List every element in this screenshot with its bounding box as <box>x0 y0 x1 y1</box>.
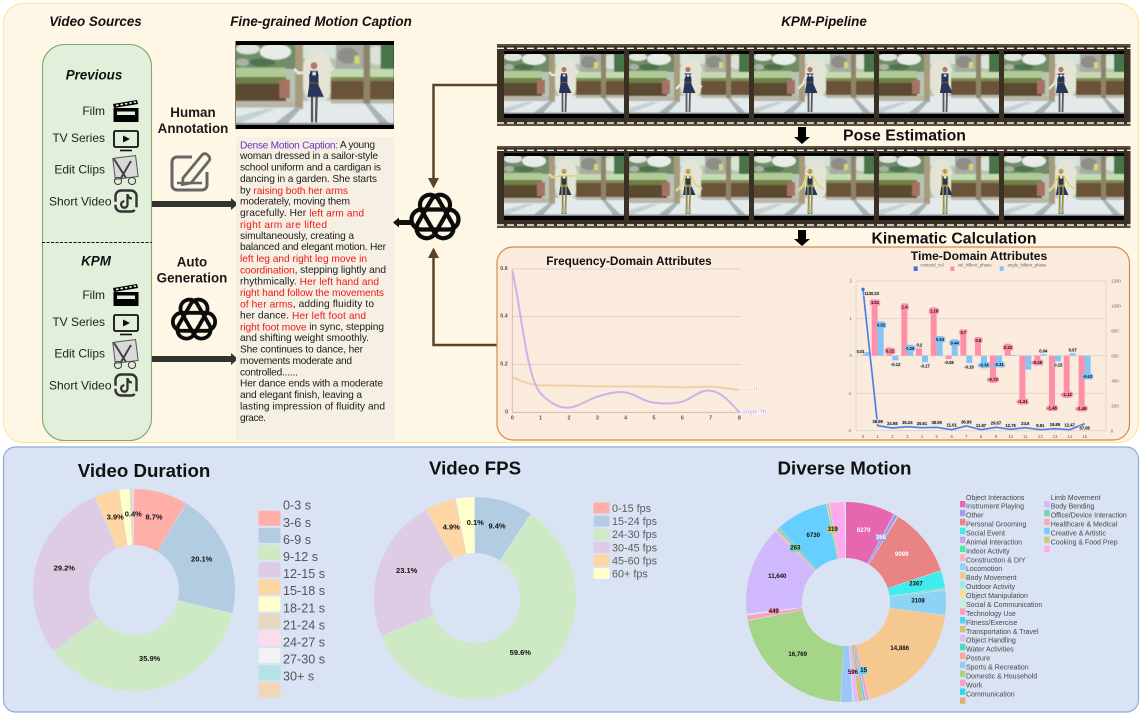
chart: time-domain attributes: 14 <box>1067 434 1073 439</box>
text block: dense motion caption: of her arms, adding fluidity to <box>240 299 374 310</box>
donut chart: video duration: 20.1% <box>191 554 213 564</box>
arrow: model to caption <box>393 218 412 228</box>
chart: time-domain attributes: -1.31 <box>1018 399 1028 404</box>
chart: time-domain attributes: -0.19 <box>964 364 974 369</box>
legend: diverse motion: Other <box>966 513 984 520</box>
chart: time-domain attributes: 0.7 <box>960 330 967 335</box>
chart: frequency-domain attributes: 7 <box>709 415 712 421</box>
chart: frequency-domain attributes: 5 <box>653 415 656 421</box>
chart: time-domain attributes: 0.5 <box>975 338 982 343</box>
legend: video duration: 3-6 s <box>283 516 311 530</box>
text block: dense motion caption: movements moderate and <box>240 356 352 367</box>
legend: video duration: 0-3 s <box>283 499 311 513</box>
donut chart: video FPS: 9.4% <box>488 522 506 530</box>
chart: time-domain attributes: 3 <box>906 434 909 439</box>
text block: dense motion caption <box>236 137 394 440</box>
chart: time-domain attributes: 0.2 <box>916 342 923 347</box>
donut chart: diverse motion: 449 <box>769 608 779 615</box>
chart: time-domain attributes: 5 <box>935 434 938 439</box>
chart: time-domain attributes: 0 <box>862 434 865 439</box>
arrow: to pose estimation <box>794 127 810 144</box>
icon: short video app <box>116 190 136 212</box>
chart: time-domain attributes: 12 <box>1038 434 1043 439</box>
label: film: Film <box>82 104 105 118</box>
film strip: source frames <box>497 44 1131 126</box>
chart: frequency-domain attributes <box>500 254 766 421</box>
text block: dense motion caption: Dense Motion Caption: A young <box>240 140 375 151</box>
donut chart: diverse motion: 368 <box>876 534 887 541</box>
chart: time-domain attributes: -0.26 <box>1033 360 1043 365</box>
legend: diverse motion: Animal Interaction <box>966 540 1022 546</box>
legend: video FPS: 24-30 fps <box>612 529 658 541</box>
chart: time-domain attributes: -0.17 <box>920 363 930 368</box>
icon: short video app (KPM) <box>116 374 136 396</box>
arrow: auto generation to caption <box>152 353 238 365</box>
donut chart: video duration: 35.9% <box>139 654 161 663</box>
legend: diverse motion: Object Interactions <box>966 495 1025 502</box>
chart: time-domain attributes: 2 <box>891 434 894 439</box>
donut chart: video duration: 29.2% <box>54 564 75 572</box>
icon: television <box>114 131 138 150</box>
chart: time-domain attributes: 0.07 <box>1069 347 1077 352</box>
legend: diverse motion: Technology Use <box>966 611 1016 618</box>
chart: frequency-domain attributes: angle_fft <box>743 409 766 415</box>
text block: dense motion caption: rhythmically. Her left hand and <box>240 276 379 287</box>
label: TV series: TV Series <box>52 131 105 145</box>
chart: time-domain attributes: 29.87 <box>991 420 1002 425</box>
legend: diverse motion: Sports & Recreation <box>966 664 1029 672</box>
label: TV series (KPM): TV Series <box>52 315 105 329</box>
donut chart: diverse motion: 9099 <box>895 551 909 558</box>
donut chart: video FPS: 23.1% <box>396 566 418 575</box>
legend: diverse motion <box>960 495 1127 704</box>
text block: dense motion caption: left leg and right leg move in <box>240 254 367 265</box>
legend: diverse motion: Transportation & Travel <box>966 629 1039 636</box>
text block: dense motion caption: grace. <box>240 413 266 424</box>
title: time-domain: Time-Domain Attributes <box>911 249 1047 263</box>
legend: diverse motion: Water Activities <box>966 647 1014 654</box>
chart: time-domain attributes: 1.51 <box>871 300 880 305</box>
label: edit clips: Edit Clips <box>54 162 105 176</box>
text block: dense motion caption: lasting impression of fluidity and <box>240 402 385 412</box>
text block: dense motion caption: right hand follow the movements <box>240 288 384 299</box>
chart: time-domain attributes <box>847 249 1121 439</box>
icon: scissors on film <box>113 156 138 185</box>
chart: time-domain attributes: 0 <box>1111 428 1114 433</box>
chart: frequency-domain attributes: 0 <box>511 415 514 421</box>
donut chart: video FPS: 4.9% <box>443 522 460 532</box>
chart: time-domain attributes: -0.08 <box>944 360 954 365</box>
text block: dense motion caption: right foot move in sync, stepping <box>240 322 384 333</box>
icon: central model logo <box>412 191 458 242</box>
legend: video duration: 24-27 s <box>283 636 325 650</box>
legend: video duration: 18-21 s <box>283 601 325 615</box>
label: edit clips (KPM): Edit Clips <box>54 346 105 360</box>
chart: time-domain attributes: 600 <box>1111 353 1119 358</box>
film strip: pose frames <box>497 146 1131 228</box>
label: human annotation: Human <box>170 105 216 120</box>
legend: diverse motion: Posture <box>966 656 990 662</box>
chart: frequency-domain attributes: vel_fft <box>743 387 759 393</box>
chart: time-domain attributes: 11.87 <box>976 423 987 428</box>
chart: time-domain attributes: centroid_vel <box>920 262 944 267</box>
chart: frequency-domain attributes: 3 <box>596 415 599 421</box>
chart: frequency-domain attributes: 6 <box>681 415 684 421</box>
donut chart: diverse motion: 596 <box>848 669 859 676</box>
text block: dense motion caption: simultaneously, creating a <box>240 231 354 242</box>
text block: dense motion caption: moderately, moving them <box>240 197 350 208</box>
icon: clapperboard (KPM) <box>113 284 138 306</box>
icon: generation model logo <box>173 296 215 342</box>
chart: time-domain attributes: 24.98 <box>887 421 898 426</box>
chart: time-domain attributes: 19.89 <box>1050 422 1061 427</box>
panel: kinematic attributes <box>497 247 1130 440</box>
donut chart: video FPS: 59.6% <box>510 648 531 657</box>
text block: dense motion caption: and elegant finish, leaving a <box>240 390 362 401</box>
legend: diverse motion: Cooking & Food Prep <box>1051 540 1118 546</box>
chart: time-domain attributes: 400 <box>1111 378 1119 383</box>
chart: time-domain attributes: 12.47 <box>1064 422 1076 427</box>
heading: fine-grained motion caption: Fine-grained Motion Caption <box>230 14 412 29</box>
legend: video duration: 9-12 s <box>283 550 318 564</box>
legend: diverse motion: Healthcare & Medical <box>1051 522 1118 529</box>
donut chart: diverse motion: 2367 <box>909 580 923 588</box>
legend: video FPS <box>594 502 658 580</box>
legend: video duration: 27-30 s <box>283 653 325 667</box>
chart: time-domain attributes: -0.15 <box>1053 362 1063 367</box>
chart: time-domain attributes: 0.22 <box>886 348 895 353</box>
chart: time-domain attributes: angle_hilbert_phase <box>1007 262 1047 267</box>
chart: time-domain attributes: 1.4 <box>902 304 908 309</box>
photo: caption video frame <box>233 41 396 129</box>
legend: diverse motion: Instrument Playing <box>966 504 1024 511</box>
donut chart: video duration <box>54 510 213 663</box>
donut chart: video FPS: 0.1% <box>467 518 484 527</box>
legend: diverse motion: Social & Communication <box>966 602 1042 609</box>
legend: video duration: 21-24 s <box>283 618 325 632</box>
label: film (KPM): Film <box>82 288 105 302</box>
legend: diverse motion: Office/Device Interaction <box>1051 513 1127 520</box>
donut chart: video FPS <box>396 518 548 671</box>
label: pose estimation: Pose Estimation <box>843 128 966 144</box>
chart: time-domain attributes: 1.29 <box>930 308 939 313</box>
text block: dense motion caption: balanced and elegant motion. Her <box>240 242 387 253</box>
chart: time-domain attributes: -1.48 <box>1047 405 1057 410</box>
chart: time-domain attributes: 0.01 <box>857 349 865 354</box>
chart: time-domain attributes: vel_hilbert_phase <box>958 262 992 267</box>
legend: diverse motion: Body Bending <box>1051 504 1094 511</box>
donut chart: diverse motion: 6270 <box>857 527 871 534</box>
chart: time-domain attributes: 10 <box>1008 434 1014 439</box>
chart: time-domain attributes: 38.59 <box>931 420 943 425</box>
chart: time-domain attributes: 11 <box>1023 434 1028 439</box>
chart: time-domain attributes: 24.6 <box>1021 421 1030 426</box>
legend: diverse motion: Work <box>966 682 983 689</box>
chart: time-domain attributes: -0.73 <box>988 377 998 382</box>
text block: dense motion caption: woman dressed in a sailor-style <box>239 151 378 162</box>
panel: pipeline background <box>4 4 1138 442</box>
label: short video: Short Video <box>49 194 112 208</box>
chart: time-domain attributes: 9.81 <box>1036 423 1045 428</box>
panel: video sources <box>42 44 152 440</box>
text block: dense motion caption: right arm are lifted <box>240 220 327 230</box>
donut chart: diverse motion <box>768 526 925 676</box>
chart: time-domain attributes: 0.92 <box>877 322 886 327</box>
label: kinematic calculation: Kinematic Calculation <box>871 230 1037 248</box>
chart: time-domain attributes: -0.34 <box>979 362 989 367</box>
legend: video FPS: 0-15 fps <box>612 503 652 515</box>
icon: pencil and note <box>172 154 210 190</box>
chart: time-domain attributes: 1130.23 <box>864 291 880 296</box>
chart: time-domain attributes: 15 <box>1082 434 1088 439</box>
chart: time-domain attributes: 1 <box>849 316 852 321</box>
donut chart: diverse motion: 6730 <box>807 532 821 539</box>
legend: diverse motion: Social Event <box>966 530 1005 538</box>
chart: frequency-domain attributes: 0.6 <box>500 266 508 272</box>
text block: dense motion caption: Her dance ends with a moderate <box>240 379 383 390</box>
chart: frequency-domain attributes: 2 <box>568 415 571 421</box>
donut chart: diverse motion: 263 <box>790 544 801 552</box>
chart: time-domain attributes: -1.13 <box>1062 392 1072 397</box>
legend: diverse motion: Outdoor Activity <box>966 584 1016 591</box>
label: KPM: KPM <box>81 254 112 268</box>
legend: video duration: 12-15 s <box>283 567 325 581</box>
text block: dense motion caption: She continues to dance, her <box>240 345 364 356</box>
icon: clapperboard <box>113 100 138 122</box>
legend: diverse motion: Locomotion <box>966 566 1002 573</box>
donut chart: diverse motion: 11,640 <box>768 573 787 580</box>
donut chart: video duration: 8.7% <box>145 512 163 522</box>
legend: video duration: 15-18 s <box>283 584 325 598</box>
label: auto generation: Generation <box>157 270 227 286</box>
chart: time-domain attributes: 11.01 <box>947 422 957 427</box>
legend: diverse motion: Communication <box>966 691 1015 698</box>
heading: video sources: Video Sources <box>49 14 142 29</box>
chart: time-domain attributes: 38.89 <box>872 419 884 424</box>
chart: time-domain attributes: 0 <box>849 353 852 358</box>
chart: time-domain attributes: 0.32 <box>1004 345 1013 350</box>
label: auto generation <box>157 254 227 286</box>
legend: diverse motion: Construction & DIY <box>966 557 1026 564</box>
legend: diverse motion: Personal Grooming <box>966 522 1026 529</box>
chart: time-domain attributes: 1200 <box>1111 278 1121 283</box>
arrow: film strip to model <box>428 85 497 188</box>
chart: time-domain attributes: 0.04 <box>1039 348 1048 353</box>
legend: diverse motion: Indoor Activity <box>966 548 1010 555</box>
label: auto generation: Auto <box>177 254 207 270</box>
title: diverse motion: Diverse Motion <box>778 458 911 478</box>
chart: time-domain attributes: 4 <box>921 434 924 439</box>
arrow: to kinematic calculation <box>794 230 810 246</box>
label: short video (KPM): Short Video <box>49 378 112 392</box>
icon: scissors on film (KPM) <box>113 340 138 369</box>
legend: diverse motion: Body Movement <box>966 575 1017 582</box>
label: human annotation: Annotation <box>158 121 228 136</box>
chart: time-domain attributes: -0.63 <box>1083 374 1093 379</box>
donut chart: diverse motion: 16,769 <box>788 651 808 658</box>
donut chart: diverse motion: 15 <box>860 667 868 674</box>
text block: dense motion caption: coordination, stepping lightly and <box>240 265 386 276</box>
text block: dense motion caption: dancing in a garden. She starts <box>240 174 377 185</box>
donut chart: diverse motion: 3108 <box>911 598 925 604</box>
chart: time-domain attributes: -1.49 <box>1077 406 1087 411</box>
chart: time-domain attributes: 13 <box>1053 434 1058 439</box>
legend: video duration <box>258 499 325 697</box>
legend: diverse motion: Object Manipulation <box>966 593 1028 600</box>
chart: time-domain attributes: 9 <box>995 434 998 439</box>
label: previous: Previous <box>66 68 122 82</box>
donut chart: diverse motion: 319 <box>828 526 838 533</box>
donut chart: video duration: 3.9% <box>107 512 124 522</box>
chart: frequency-domain attributes: 1 <box>539 415 542 421</box>
chart: time-domain attributes: 800 <box>1111 328 1119 333</box>
chart: time-domain attributes: 12.75 <box>1005 423 1017 428</box>
text block: dense motion caption: gracefully. Her left arm and <box>240 208 364 219</box>
chart: time-domain attributes: -2 <box>847 428 852 433</box>
legend: diverse motion: Domestic & Household <box>966 673 1037 680</box>
text block: dense motion caption: by raising both her arms <box>240 185 348 196</box>
title: video duration: Video Duration <box>78 460 210 481</box>
donut chart: diverse motion: 14,886 <box>890 645 910 652</box>
chart: time-domain attributes: 57.06 <box>1079 425 1091 430</box>
legend: diverse motion: Limb Movement <box>1051 495 1101 502</box>
chart: time-domain attributes: -1 <box>847 391 852 396</box>
chart: time-domain attributes: 0.53 <box>936 337 945 342</box>
arrow: attributes to model <box>428 248 497 345</box>
legend: video FPS: 30-45 fps <box>612 542 658 554</box>
chart: frequency-domain attributes: 8 <box>738 415 741 421</box>
donut chart: video duration: 0.4% <box>125 510 142 518</box>
title: frequency-domain: Frequency-Domain Attributes <box>546 254 712 268</box>
arrow: human annotation to caption <box>152 198 238 210</box>
legend: video FPS: 15-24 fps <box>612 516 658 528</box>
text block: dense motion caption: her dance. Her left foot and <box>240 310 366 322</box>
chart: frequency-domain attributes: 0.2 <box>500 361 508 367</box>
chart: time-domain attributes: 1 <box>876 434 879 439</box>
chart: frequency-domain attributes: 4 <box>624 415 627 421</box>
chart: time-domain attributes: 26.61 <box>917 421 928 426</box>
icon: television (KPM) <box>114 315 138 334</box>
chart: time-domain attributes: 7 <box>965 434 968 439</box>
label: human annotation <box>158 105 228 136</box>
chart: time-domain attributes: 200 <box>1111 403 1119 408</box>
chart: frequency-domain attributes: 0.4 <box>500 314 508 320</box>
text block: dense motion caption: and shifting weight smoothly. <box>240 333 369 344</box>
legend: video FPS: 60+ fps <box>612 568 648 580</box>
legend: video duration: 6-9 s <box>283 533 311 547</box>
chart: time-domain attributes: 1000 <box>1111 303 1121 308</box>
chart: frequency-domain attributes: 0 <box>505 409 508 415</box>
heading: KPM pipeline: KPM-Pipeline <box>781 14 867 29</box>
chart: time-domain attributes: 0.29 <box>906 346 915 351</box>
text block: dense motion caption: controlled...... <box>240 367 298 378</box>
title: video FPS: Video FPS <box>429 458 521 478</box>
chart: time-domain attributes: -0.31 <box>994 362 1004 367</box>
legend: diverse motion: Fitness/Exercise <box>966 620 1017 627</box>
chart: time-domain attributes: 6 <box>950 434 953 439</box>
legend: diverse motion: Creative & Artistic <box>1051 530 1106 538</box>
chart: time-domain attributes: 2 <box>849 278 852 283</box>
chart: time-domain attributes: 8 <box>980 434 983 439</box>
chart: time-domain attributes: 36.99 <box>961 419 972 424</box>
chart: time-domain attributes: 0.44 <box>951 340 959 345</box>
legend: video FPS: 45-60 fps <box>612 555 658 567</box>
panel: statistics background <box>4 447 1138 712</box>
chart: time-domain attributes: -0.12 <box>891 362 901 367</box>
chart: time-domain attributes: 35.24 <box>902 420 913 425</box>
legend: video duration: 30+ s <box>283 670 314 684</box>
legend: diverse motion: Object Handling <box>966 638 1016 645</box>
text block: dense motion caption: school uniform and a cardigan is <box>240 163 381 174</box>
